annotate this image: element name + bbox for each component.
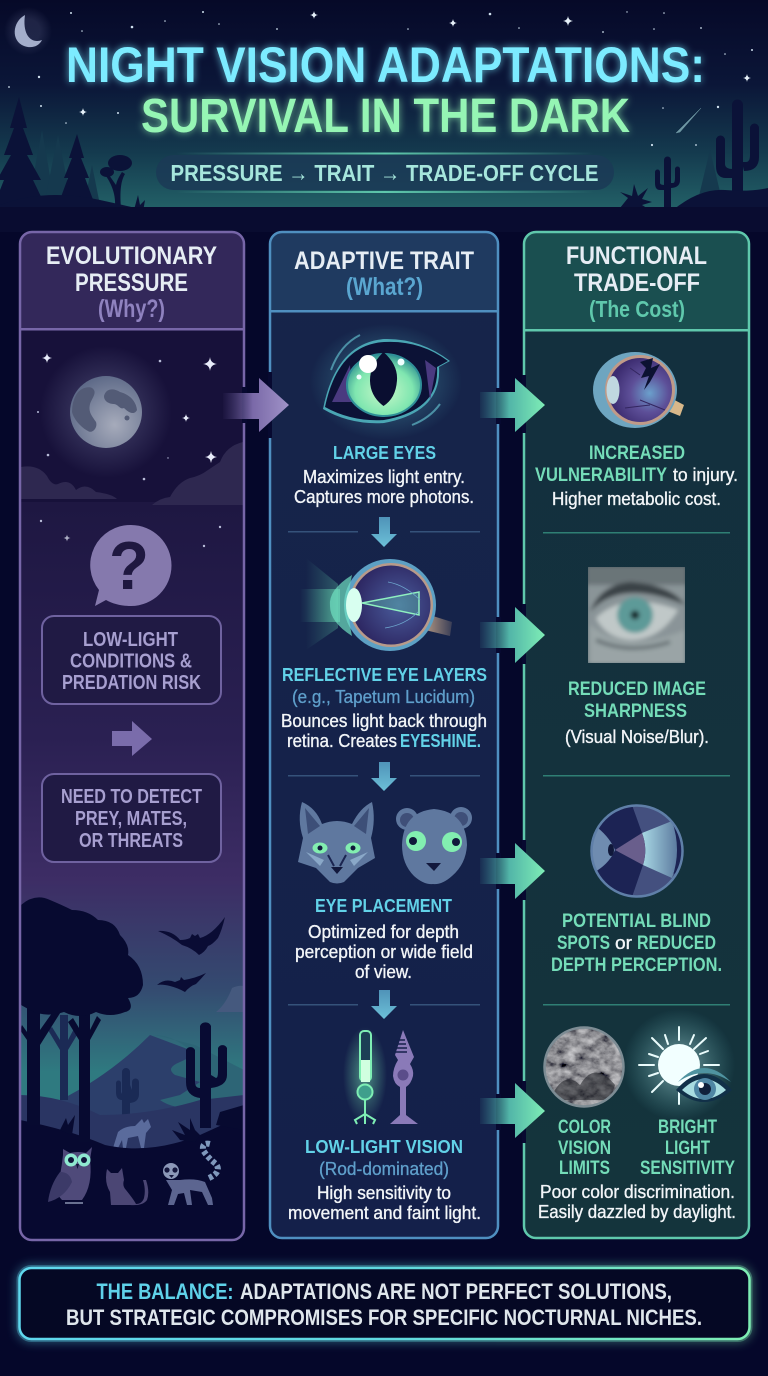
text: bright light sensitivity: LIGHT	[665, 1138, 710, 1159]
text: reduced image sharpness	[565, 679, 709, 747]
panel: evolutionary pressure	[20, 232, 244, 1240]
text: reduced image sharpness: SHARPNESS	[584, 701, 687, 722]
icon: rod and cone cells	[343, 1027, 418, 1124]
text: color and dazzle summary: Poor color discrimination.	[540, 1182, 735, 1202]
background pine silhouettes	[28, 130, 722, 205]
column header: adaptive trait: (What?)	[346, 273, 423, 301]
cat	[106, 1168, 148, 1205]
column header: functional trade-off	[524, 232, 749, 329]
wolf	[113, 1119, 151, 1148]
text: increased vulnerability	[535, 443, 738, 509]
tree back silhouette	[48, 1015, 76, 1100]
text: color and dazzle summary: Easily dazzled by daylight.	[538, 1202, 736, 1222]
text: color vision limits: COLOR	[558, 1117, 611, 1138]
text: reflective eye layers: EYESHINE.	[400, 730, 481, 751]
callout: need to detect: OR THREATS	[79, 830, 183, 852]
text: eye placement	[295, 895, 473, 982]
text: eye placement: of view.	[355, 962, 412, 982]
column header: functional trade-off: TRADE-OFF	[574, 269, 700, 297]
callout: low-light conditions	[42, 616, 221, 704]
icon: grayscale night view	[544, 1027, 624, 1107]
column header: evolutionary pressure	[20, 232, 244, 329]
icon: panther face	[396, 807, 472, 884]
text: potential blind spots: DEPTH PERCEPTION.	[551, 955, 722, 976]
text: large eyes	[294, 442, 474, 507]
text: increased vulnerability: to injury.	[673, 465, 738, 485]
text: low-light vision: LOW-LIGHT VISION	[305, 1136, 463, 1157]
text: potential blind spots: SPOTS	[557, 933, 610, 954]
title: NIGHT VISION ADAPTATIONS:	[66, 37, 705, 93]
icon: bright sun and eye	[623, 1009, 735, 1121]
icon: injured eye	[593, 352, 684, 428]
left forest silhouettes	[0, 97, 150, 212]
footer banner: the balance	[20, 1268, 750, 1339]
text: increased vulnerability: Higher metabolic cost.	[552, 489, 721, 509]
desert cactus foreground	[186, 1022, 227, 1128]
callout: low-light conditions: CONDITIONS &	[70, 650, 192, 672]
arrow: down to eye placement	[371, 762, 397, 791]
text: low-light vision: movement and faint light.	[288, 1203, 481, 1223]
text: reflective eye layers	[281, 664, 487, 751]
text: reflective eye layers: Bounces light back through	[281, 711, 487, 731]
arrow: large eyes to vulnerability	[480, 378, 545, 432]
footer banner: the balance: ADAPTATIONS ARE NOT PERFECT SOLUTIONS,	[240, 1279, 672, 1304]
arrow: reflective layers to reduced sharpness	[480, 607, 545, 663]
text: eye placement: Optimized for depth	[308, 922, 459, 942]
arrow: down to low-light vision	[371, 990, 397, 1019]
panel: functional trade-off	[524, 232, 749, 1238]
panel: adaptive trait	[270, 232, 498, 1238]
text: potential blind spots: REDUCED	[637, 933, 716, 954]
right desert silhouettes	[620, 100, 768, 212]
text: bright light sensitivity: SENSITIVITY	[640, 1158, 735, 1179]
icon: eye anatomy with light ray	[300, 558, 452, 651]
arrow: low-light vision to color limits	[480, 1083, 545, 1138]
column header: adaptive trait: ADAPTIVE TRAIT	[294, 247, 474, 275]
callout: low-light conditions: PREDATION RISK	[62, 672, 201, 694]
icon: blurred eye image	[586, 565, 687, 665]
text: increased vulnerability: INCREASED	[589, 443, 685, 464]
icon: crescent moon	[4, 7, 52, 55]
tree silhouettes foreground	[20, 897, 244, 1142]
text: reflective eye layers: (e.g., Tapetum Lucidum)	[292, 687, 475, 707]
text: large eyes: Maximizes light entry.	[303, 467, 465, 487]
text: color vision limits: LIMITS	[559, 1158, 610, 1179]
column header: evolutionary pressure: (Why?)	[98, 295, 165, 323]
arrow: down to reflective layers	[371, 517, 397, 547]
text: color and dazzle summary	[538, 1182, 736, 1222]
callout: need to detect	[42, 774, 221, 862]
text: color vision limits: VISION	[558, 1138, 611, 1159]
owl	[48, 1147, 92, 1203]
arrow: eye placement to blind spots	[480, 843, 545, 899]
text: reflective eye layers: retina. Creates	[287, 731, 397, 751]
column header: evolutionary pressure: EVOLUTIONARY	[46, 242, 217, 270]
subtitle pill	[156, 152, 614, 193]
icon: cat eye	[310, 324, 462, 440]
bats	[157, 917, 225, 992]
title	[66, 37, 705, 143]
text: increased vulnerability: VULNERABILITY	[535, 465, 667, 486]
arrow: pressure to need	[112, 721, 152, 756]
icon: question speech bubble	[90, 525, 171, 606]
callout: need to detect: NEED TO DETECT	[61, 786, 202, 808]
subtitle pill: PRESSURE → TRAIT → TRADE-OFF CYCLE	[170, 160, 598, 186]
column header: functional trade-off: FUNCTIONAL	[566, 242, 707, 270]
text: eye placement: EYE PLACEMENT	[315, 895, 453, 916]
text: reduced image sharpness: (Visual Noise/Blur).	[565, 727, 709, 747]
header night sky scene	[0, 0, 768, 232]
text: low-light vision: (Rod-dominated)	[319, 1159, 449, 1179]
text: potential blind spots	[551, 911, 722, 976]
text: bright light sensitivity	[640, 1117, 735, 1179]
footer banner: the balance: THE BALANCE:	[96, 1279, 234, 1304]
icon: fox face	[298, 802, 375, 884]
column header: evolutionary pressure: PRESSURE	[75, 269, 188, 297]
text: color vision limits	[558, 1117, 611, 1179]
text: potential blind spots: or	[615, 933, 632, 953]
title: SURVIVAL IN THE DARK	[141, 90, 630, 143]
icon: question speech bubble: ?	[109, 528, 149, 604]
callout: low-light conditions: LOW-LIGHT	[83, 629, 178, 651]
text: reflective eye layers: REFLECTIVE EYE LAYERS	[282, 664, 487, 685]
text: bright light sensitivity: BRIGHT	[658, 1117, 717, 1138]
text: low-light vision	[288, 1136, 481, 1223]
column header: functional trade-off: (The Cost)	[589, 296, 685, 322]
text: potential blind spots: POTENTIAL BLIND	[562, 911, 711, 932]
icon: field of view diagram	[590, 804, 690, 898]
arrow: pressure to trait	[223, 378, 289, 432]
text: large eyes: Captures more photons.	[294, 487, 474, 507]
illustration: moon and stars	[21, 346, 243, 547]
back cactus	[116, 1068, 139, 1115]
text: eye placement: perception or wide field	[295, 942, 473, 962]
lemur	[163, 1144, 218, 1205]
callout: need to detect: PREY, MATES,	[75, 808, 187, 830]
illustration: nocturnal landscape with animals	[20, 880, 244, 1240]
text: reduced image sharpness: REDUCED IMAGE	[568, 679, 706, 700]
text: low-light vision: High sensitivity to	[317, 1183, 451, 1203]
text: large eyes: LARGE EYES	[333, 442, 436, 463]
column header: adaptive trait	[270, 232, 498, 310]
